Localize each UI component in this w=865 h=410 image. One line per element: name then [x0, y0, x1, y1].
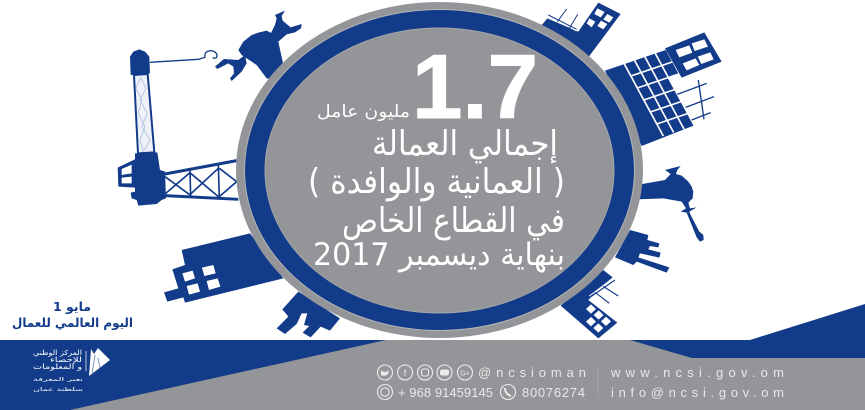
description text: بنهاية ديسمبر 2017	[313, 237, 565, 273]
description text: ( العمانية والوافدة )	[308, 162, 565, 202]
facebook and google glyphs: f	[404, 368, 407, 378]
footer band	[0, 304, 865, 410]
organisation logo text: و المعلومات	[33, 363, 82, 371]
illustration: right chimney building	[615, 230, 669, 273]
facebook and google glyphs	[404, 368, 470, 378]
occasion caption: اليوم العالمي للعمال	[12, 315, 133, 331]
illustration: lower left building	[164, 233, 283, 303]
description text: في القطاع الخاص	[342, 201, 565, 241]
description text: إجمالي العمالة	[372, 124, 558, 164]
website: www.ncsi.gov.om	[610, 365, 784, 380]
organisation logo text: نعبر المعرفة	[33, 377, 83, 383]
central badge circle	[236, 2, 643, 338]
facebook and google glyphs: G+	[460, 370, 470, 378]
organisation logo text: المركز الوطني	[33, 349, 82, 357]
illustration: hand holding spanner	[215, 11, 302, 81]
illustration: top building with antennas	[530, 3, 621, 67]
occasion caption	[12, 299, 133, 331]
whatsapp icon	[378, 384, 392, 400]
whatsapp number: + 968 91459145	[398, 385, 493, 400]
illustration: lower right building	[561, 270, 618, 338]
phone number: 80076274	[522, 385, 585, 400]
illustration: hand holding screwdriver	[637, 166, 704, 242]
organisation logo text	[33, 349, 83, 393]
description text	[308, 124, 565, 273]
illustration: crane	[118, 49, 238, 206]
organisation logo text: للإحصاء	[50, 356, 82, 364]
logo emblem	[86, 348, 110, 376]
headline number: 1.7	[412, 37, 538, 138]
organisation logo text: سلطنة عمان	[33, 387, 83, 393]
social media icons	[378, 365, 472, 380]
illustration: grid building	[605, 32, 722, 146]
phone icon	[500, 384, 516, 400]
social handle: @ncsioman	[478, 365, 586, 380]
unit label: مليون عامل	[317, 102, 410, 122]
email: info@ncsi.gov.om	[611, 385, 784, 400]
occasion caption: 1 مايو	[53, 299, 91, 314]
illustration: lower left small building	[277, 292, 340, 337]
